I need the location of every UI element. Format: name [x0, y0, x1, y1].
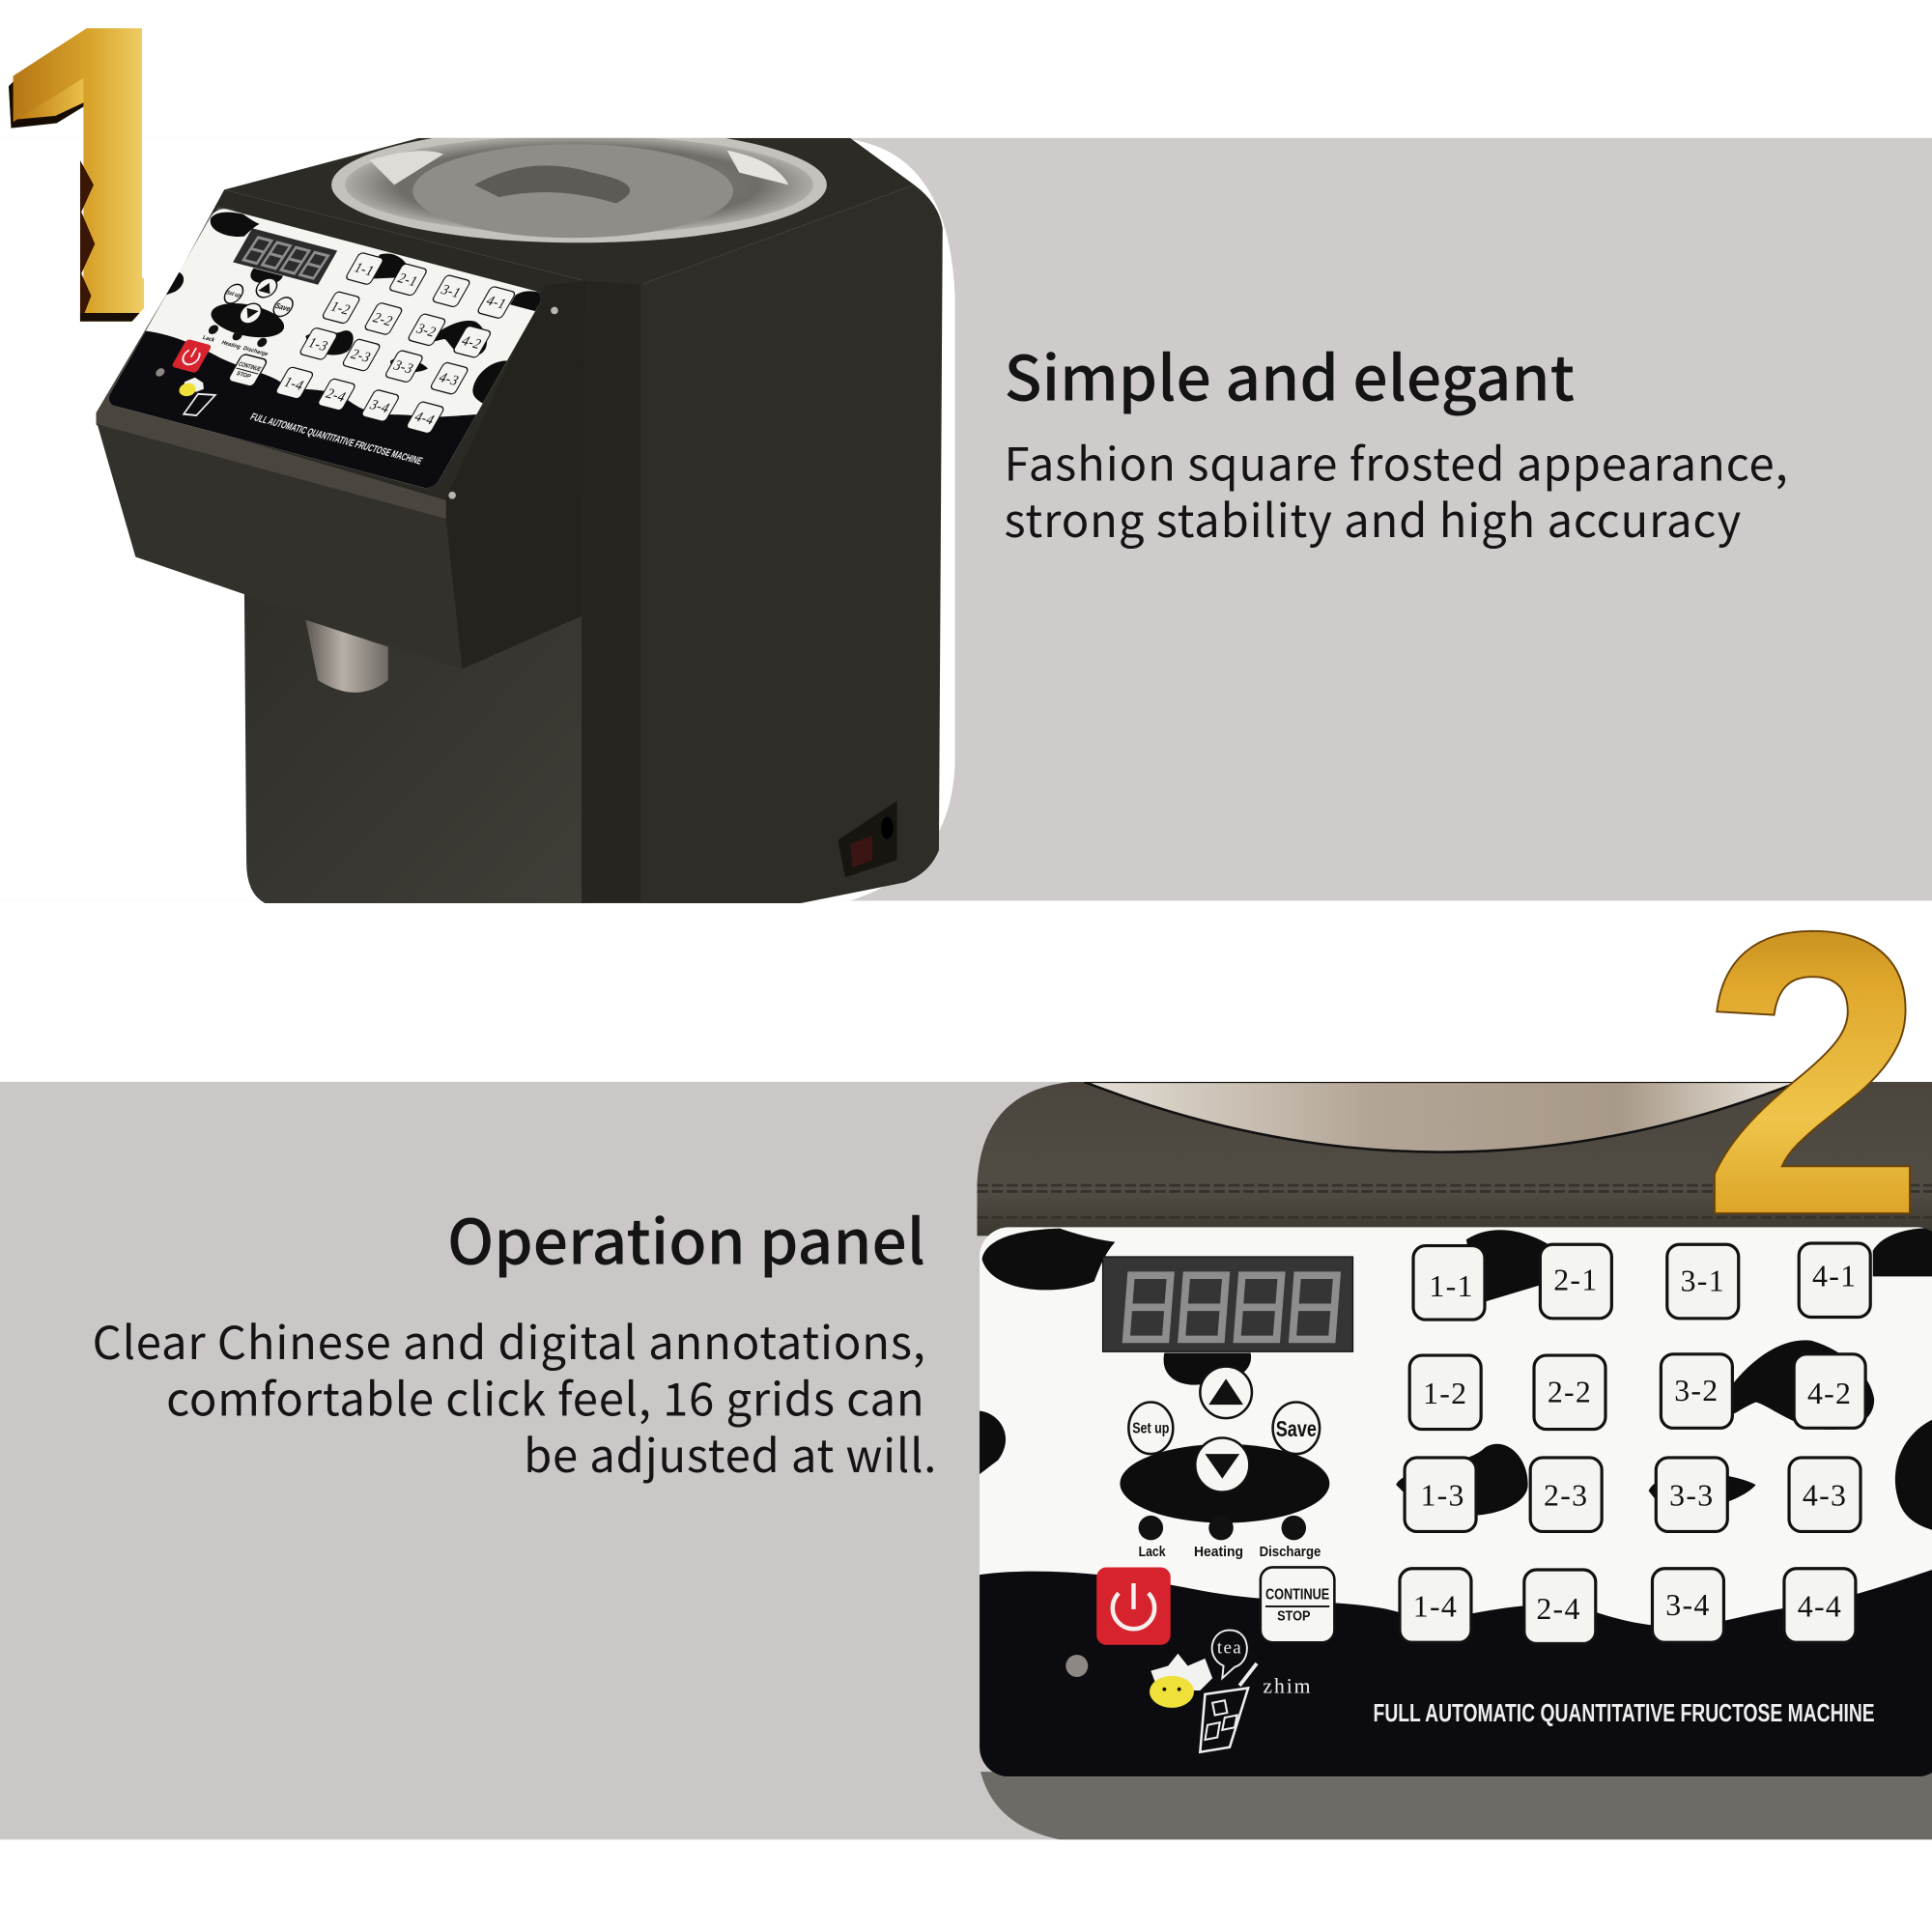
set up button: Set up	[1132, 1420, 1169, 1436]
panel buttons: CONTINUE	[237, 361, 262, 373]
panel buttons: Discharge	[242, 346, 270, 357]
panel keypad: 4-1	[483, 294, 509, 312]
number 1 numeral	[14, 28, 145, 322]
keypad: 1-2	[1423, 1377, 1467, 1410]
panel buttons: Heating	[220, 340, 242, 351]
panel keypad: 2-1	[394, 270, 421, 290]
digital display	[1103, 1257, 1353, 1351]
panel keypad: 4-4	[412, 410, 438, 429]
number 1	[8, 28, 145, 322]
body: first feature	[1005, 427, 1788, 551]
panel: bottom band background	[0, 1082, 1932, 1839]
keypad: 4-1	[1812, 1260, 1857, 1293]
indicator lights: Lack	[1139, 1545, 1166, 1560]
indicator lights	[1139, 1516, 1321, 1560]
panel buttons: Set up	[225, 290, 242, 299]
keypad: 3-4	[1665, 1588, 1711, 1622]
panel buttons	[156, 278, 294, 416]
keypad: 2-2	[1548, 1376, 1592, 1409]
panel keypad: 2-4	[323, 386, 349, 406]
body: second feature	[93, 1306, 936, 1486]
dispenser head front	[98, 425, 458, 628]
panel plate	[104, 207, 545, 491]
cow pattern	[977, 1228, 1932, 1776]
feature 2 text	[93, 1194, 936, 1486]
panel cow pattern	[103, 207, 545, 491]
stone edge	[96, 207, 446, 519]
keypad: 4-2	[1807, 1377, 1852, 1410]
logo: cow with tea: zhim	[1263, 1675, 1312, 1698]
machine corner strip	[582, 278, 643, 903]
keypad: 3-3	[1669, 1479, 1714, 1513]
keypad: 4-4	[1798, 1589, 1842, 1623]
keypad: 1-3	[1420, 1479, 1465, 1513]
panel keypad: 1-2	[327, 299, 354, 319]
control panel, angled	[103, 207, 545, 491]
photo: fructose machine	[96, 127, 943, 903]
keypad: 2-1	[1553, 1263, 1599, 1296]
dispenser head base	[96, 189, 585, 524]
seam lines	[977, 1185, 1932, 1217]
panel keypad: 3-2	[413, 322, 440, 341]
panel keypad: 4-3	[436, 370, 462, 389]
machine right side	[640, 185, 943, 903]
steel screws	[448, 307, 558, 499]
body: first feature: Fashion square frosted appearance,	[1005, 427, 1788, 494]
nozzle	[305, 620, 388, 693]
save button: Save	[1276, 1416, 1317, 1441]
keypad: 3-2	[1674, 1374, 1719, 1407]
panel buttons: STOP	[235, 371, 252, 380]
panel keypad: 4-2	[458, 333, 485, 353]
panel keypad: 3-3	[390, 358, 416, 377]
panel keypad	[274, 250, 516, 436]
panel buttons: Save	[273, 301, 293, 313]
machine lower front	[243, 594, 591, 903]
keypad	[1400, 1243, 1870, 1644]
keypad: 1-1	[1429, 1269, 1474, 1303]
photo: control panel close-up	[961, 1082, 1932, 1846]
power socket	[838, 801, 897, 877]
panel keypad: 1-3	[305, 335, 331, 355]
continue stop button: STOP	[1277, 1608, 1311, 1624]
panel keypad: 1-4	[280, 375, 307, 394]
logo: cow with tea	[1150, 1631, 1312, 1752]
keypad: 2-4	[1536, 1592, 1581, 1626]
heading: operation panel: Operation panel	[447, 1194, 925, 1283]
body: second feature: be adjusted at will.	[524, 1419, 936, 1486]
panel keypad: 2-2	[370, 310, 396, 329]
indicator lights: Discharge	[1260, 1545, 1321, 1560]
heading: simple and elegant: Simple and elegant	[1005, 330, 1575, 419]
panel plate	[980, 1227, 1932, 1776]
keypad: 2-3	[1544, 1479, 1588, 1513]
keypad: 1-4	[1413, 1589, 1458, 1623]
steel bowl	[331, 127, 827, 242]
machine lower surface	[961, 1772, 1932, 1846]
power button	[1096, 1567, 1171, 1645]
panel keypad: 2-3	[348, 347, 374, 366]
panel: white rounded photo area	[0, 138, 955, 900]
panel keypad: 1-1	[351, 260, 377, 279]
number 2: 2	[1701, 850, 1925, 1298]
panel: top band background	[0, 138, 1932, 900]
status dot	[1065, 1655, 1088, 1677]
keypad: 4-3	[1803, 1479, 1847, 1513]
indicator lights: Heating	[1194, 1545, 1243, 1560]
panel keypad: 3-1	[438, 282, 464, 301]
number 1 flag	[9, 37, 89, 128]
body: second feature: Clear Chinese and digital annotations,	[93, 1306, 925, 1373]
dispenser head side	[443, 281, 585, 669]
down button	[1195, 1438, 1249, 1492]
panel keypad: 3-4	[366, 397, 393, 416]
logo: cow with tea: tea	[1217, 1638, 1242, 1659]
body: second feature: comfortable click feel, 16 grids can	[166, 1363, 924, 1430]
continue stop button: CONTINUE	[1265, 1587, 1329, 1604]
panel machine name: FULL AUTOMATIC QUANTITATIVE FRUCTOSE MACHINE	[248, 412, 424, 468]
keypad: 3-1	[1681, 1264, 1725, 1298]
body: first feature: strong stability and high accuracy	[1005, 484, 1741, 551]
up button	[1200, 1367, 1252, 1418]
machine top face	[224, 138, 914, 285]
steel bowl edge	[1084, 1082, 1799, 1152]
feature 1 text	[1005, 330, 1788, 551]
panel buttons: Lack	[201, 335, 216, 344]
continue stop button	[1261, 1567, 1334, 1642]
set up button	[1128, 1403, 1173, 1454]
machine top surface	[961, 1082, 1932, 1236]
save button	[1273, 1403, 1320, 1454]
panel display	[233, 228, 337, 285]
